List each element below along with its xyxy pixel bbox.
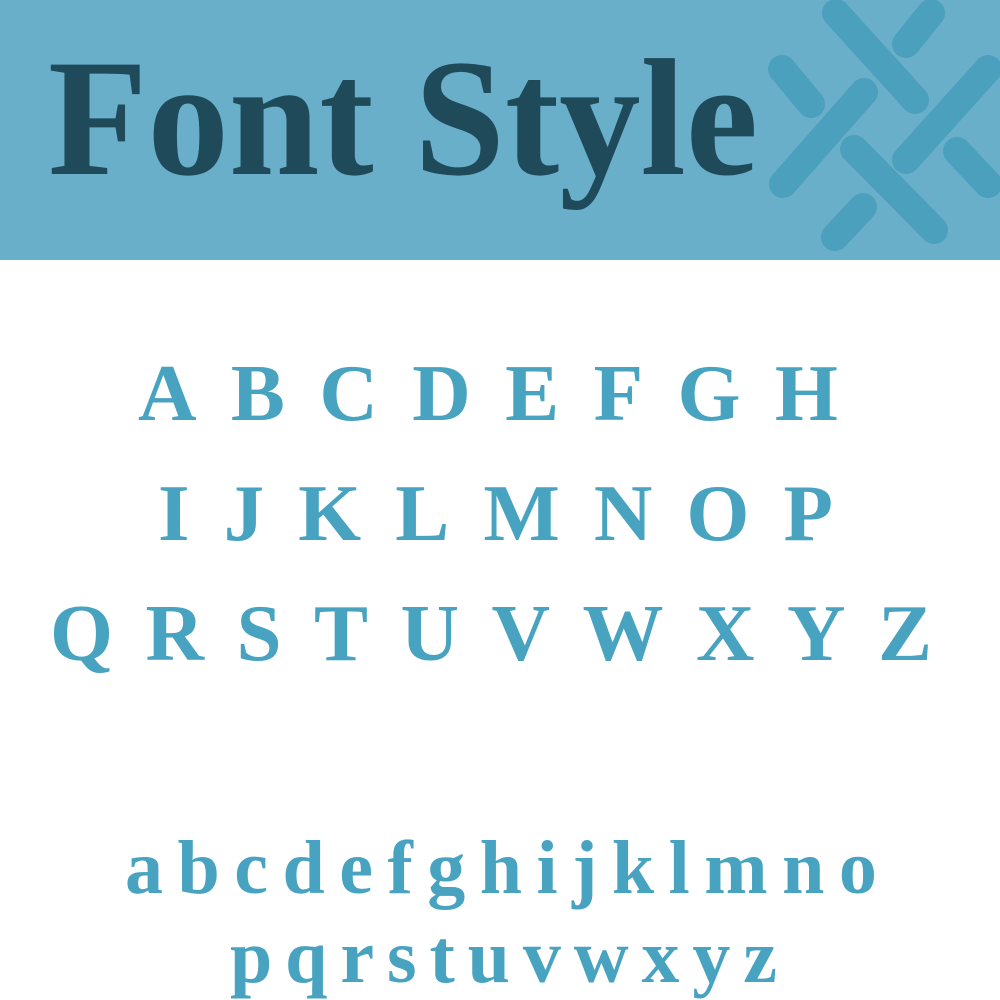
uppercase row 3: V — [492, 588, 550, 678]
uppercase row 1: B — [231, 348, 285, 438]
uppercase row 3: T — [314, 588, 368, 678]
uppercase row 1: A — [138, 348, 196, 438]
lowercase row 2: p — [230, 915, 272, 999]
uppercase row 1: D — [412, 348, 471, 438]
title: Font Style — [48, 26, 758, 211]
lowercase row 1: e — [339, 826, 373, 910]
lowercase row 1: f — [387, 826, 413, 910]
uppercase row 2: L — [395, 468, 449, 558]
uppercase row 3: W — [583, 588, 664, 678]
uppercase row 1: H — [775, 348, 838, 438]
lowercase row 1: m — [704, 826, 768, 910]
lowercase row 1: k — [612, 826, 654, 910]
uppercase row 1: E — [505, 348, 559, 438]
uppercase row 1: G — [677, 348, 740, 438]
icon: woven X logo — [768, 0, 1000, 251]
lowercase row 2: r — [340, 915, 374, 999]
uppercase row 2: I — [158, 468, 190, 558]
uppercase row 3: Y — [787, 588, 845, 678]
uppercase row 2: M — [483, 468, 560, 558]
uppercase row 1: F — [594, 348, 643, 438]
lowercase row 2: t — [429, 915, 455, 999]
uppercase row 3: Q — [50, 588, 113, 678]
uppercase row 2: N — [594, 468, 652, 558]
uppercase row 1: C — [319, 348, 378, 438]
lowercase row 2: q — [285, 915, 327, 999]
uppercase row 3: S — [236, 588, 282, 678]
lowercase row 1: b — [177, 826, 220, 910]
uppercase row 3: U — [401, 588, 459, 678]
lowercase row 2: u — [468, 915, 510, 999]
uppercase row 2: P — [783, 468, 833, 558]
uppercase row 2: J — [224, 468, 264, 558]
lowercase row 1: n — [782, 826, 824, 910]
lowercase row 1: c — [234, 826, 268, 910]
lowercase row 2 — [230, 915, 777, 999]
uppercase row 3: X — [696, 588, 754, 678]
lowercase row 2: x — [641, 915, 679, 999]
uppercase row 2 — [158, 468, 833, 558]
uppercase row 2: K — [298, 468, 361, 558]
lowercase row 2: y — [692, 915, 730, 999]
lowercase row 1 — [125, 826, 877, 910]
lowercase row 2: w — [574, 915, 629, 999]
uppercase row 2: O — [686, 468, 749, 558]
lowercase row 1: o — [839, 826, 877, 910]
uppercase row 1 — [138, 348, 838, 438]
lowercase row 1: g — [427, 826, 465, 910]
lowercase row 2: z — [743, 915, 777, 999]
lowercase row 1: j — [572, 826, 597, 910]
lowercase row 2: v — [523, 915, 561, 999]
lowercase row 1: l — [669, 826, 690, 910]
lowercase row 1: i — [536, 826, 558, 910]
uppercase row 3: R — [146, 588, 204, 678]
header band — [0, 0, 1000, 260]
lowercase row 1: a — [125, 826, 163, 910]
lowercase row 1: d — [282, 826, 325, 910]
lowercase row 2: s — [387, 915, 417, 999]
lowercase row 1: h — [480, 826, 522, 910]
uppercase row 3 — [50, 588, 932, 678]
uppercase row 3: Z — [878, 588, 932, 678]
